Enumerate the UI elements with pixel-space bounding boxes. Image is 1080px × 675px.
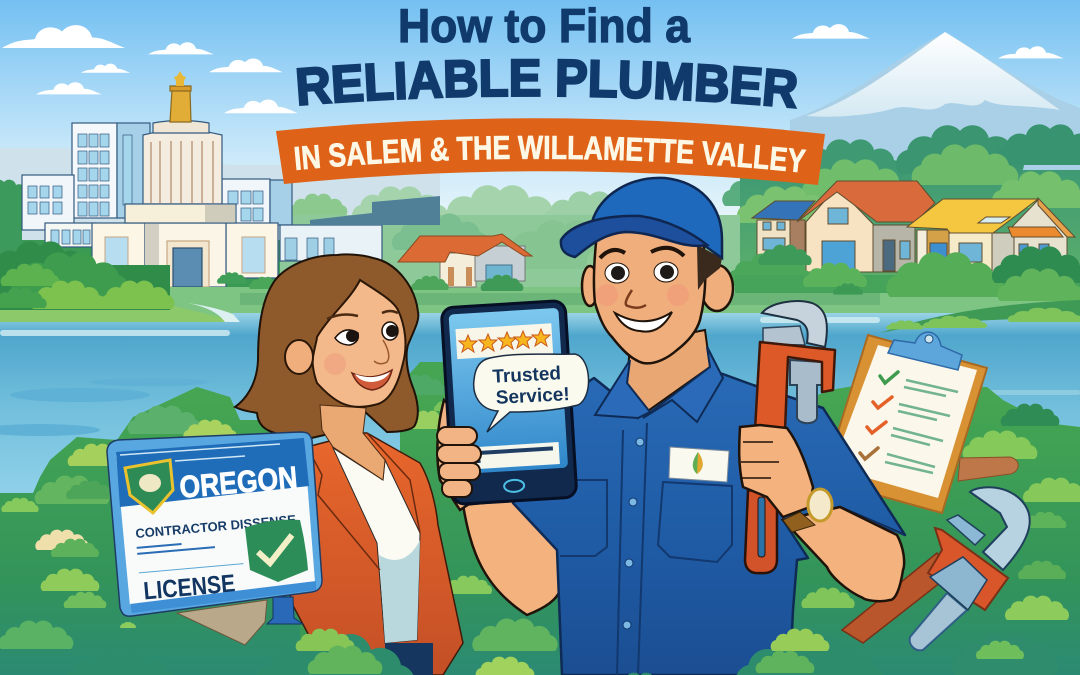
wrench hand and watch [739, 425, 832, 532]
face [313, 280, 405, 407]
subtitle banner [276, 118, 825, 185]
left forearm [463, 500, 560, 615]
speech bubble: trusted service: Trusted [492, 363, 562, 388]
mountain [790, 32, 1080, 170]
jacket [290, 433, 463, 675]
stars [459, 329, 550, 352]
hair [697, 245, 722, 290]
foreground foliage base [0, 387, 300, 675]
title [276, 0, 825, 185]
right forearm [783, 507, 904, 601]
hair [235, 254, 418, 441]
shield icon [125, 460, 173, 513]
check badge [245, 520, 308, 582]
pipe wrench held [745, 301, 835, 573]
cap [592, 178, 722, 258]
blouse [333, 448, 420, 643]
card text: LICENSE [142, 570, 236, 605]
bottom bushes [61, 629, 885, 675]
middle foliage clusters [393, 375, 558, 675]
sleeve hem shade [840, 507, 905, 535]
collar [595, 347, 723, 422]
cheeks, nose, mouth [596, 284, 689, 332]
left foliage clusters [0, 406, 237, 649]
shirt body [513, 347, 905, 675]
card text: CONTRACTOR DISSENSE [135, 512, 297, 541]
phone [441, 300, 577, 505]
face [594, 228, 705, 363]
sky background [0, 0, 1080, 240]
phone hand fingers front [437, 427, 481, 497]
buttons [623, 438, 644, 629]
clouds [2, 24, 1064, 113]
bushes on the banks [0, 241, 1080, 310]
ears [582, 265, 733, 311]
title line 2: RELIABLE PLUMBER [296, 58, 798, 109]
capitol building [22, 71, 440, 287]
icon: wrench lower right [842, 487, 1030, 650]
figure: plumber [437, 178, 905, 675]
figure: woman [235, 254, 463, 675]
right houses [752, 181, 1075, 275]
far hills and trees [0, 124, 1080, 290]
neck [627, 330, 710, 418]
handle behind clipboard [958, 457, 1018, 481]
right foliage clusters [801, 404, 1080, 675]
centre house [398, 234, 532, 291]
phone hand back [437, 400, 475, 510]
speech bubble: trusted service [474, 354, 589, 432]
mouth, cheek, nose [324, 340, 392, 390]
placket and pockets [560, 423, 732, 675]
card text [130, 460, 307, 606]
name badge [669, 447, 729, 482]
icon: clipboard checklist [823, 332, 1018, 513]
eyes [327, 311, 398, 345]
field and midground shores [0, 287, 1080, 322]
speech bubble: trusted service: Service! [495, 384, 570, 409]
neck [320, 405, 385, 480]
cap brim [561, 216, 707, 257]
lake [0, 313, 1080, 500]
license card with clipboard under it [107, 432, 322, 645]
title line 1: How to Find a [398, 0, 691, 52]
card text: OREGON [178, 460, 299, 505]
jacket lapels [307, 433, 420, 570]
ear [285, 340, 313, 374]
eyes and brows [600, 248, 684, 283]
subtitle text: IN SALEM & THE WILLAMETTE VALLEY [294, 136, 806, 172]
